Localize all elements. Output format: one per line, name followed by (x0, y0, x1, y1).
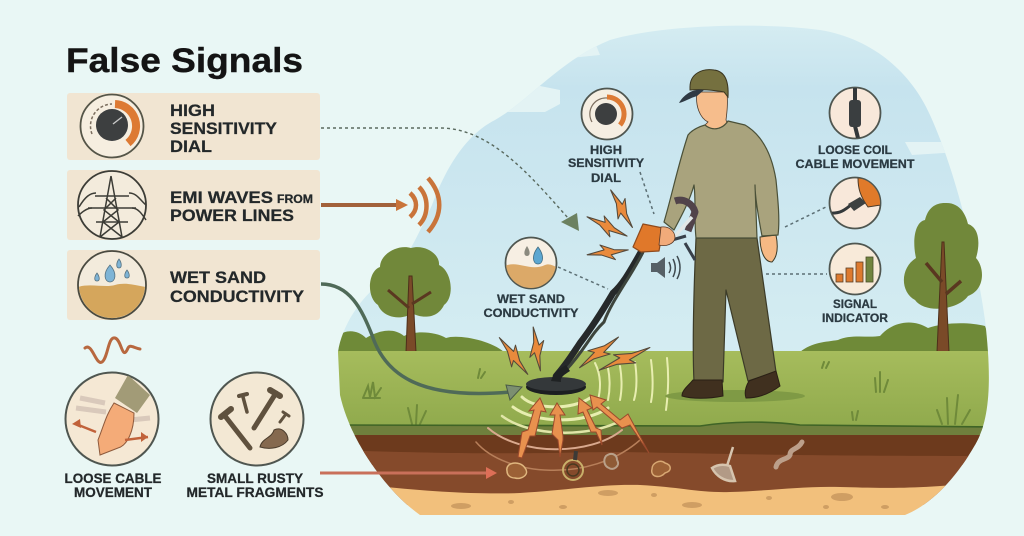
shadow under person (665, 390, 805, 402)
lightning bolts near control box (583, 186, 642, 267)
label: small rusty metal fragments: METAL FRAGMENTS (186, 485, 324, 500)
handle (675, 217, 692, 236)
label: loose coil cable movement: LOOSE COIL (818, 143, 892, 157)
upward signal arrows (518, 395, 649, 458)
label: loose cable movement (64, 471, 162, 500)
icon: dial callout (582, 88, 632, 140)
clouds (508, 46, 945, 155)
sand (390, 484, 946, 515)
turf edge (330, 422, 1000, 445)
panel: high sensitivity dial (67, 93, 320, 160)
label: loose cable movement: MOVEMENT (74, 485, 153, 500)
cap brim (679, 90, 704, 103)
icon: cable wave squiggle (85, 338, 140, 362)
label: high sensitivity dial (170, 101, 278, 156)
icon: pylon (78, 171, 146, 239)
buried object: wire (776, 442, 802, 467)
canopy (370, 247, 451, 317)
dashed connectors (558, 172, 828, 289)
label: small rusty metal fragments: SMALL RUSTY (207, 471, 303, 486)
label: dial callout (568, 143, 644, 185)
buried object: rock (507, 463, 527, 478)
lightning bolts near coil (491, 325, 653, 381)
panel: EMI waves (67, 170, 320, 240)
soil and sand layers (330, 422, 1000, 520)
background bushes left (336, 331, 504, 352)
label: small rusty metal fragments (186, 471, 324, 500)
label: high sensitivity dial: HIGH (170, 101, 215, 120)
panel: wet sand conductivity (67, 250, 320, 320)
icon: loose cable movement (66, 372, 158, 466)
trunk (937, 242, 949, 352)
right hand (760, 235, 777, 262)
lower soil (363, 451, 968, 505)
label: high sensitivity dial: SENSITIVITY (170, 119, 278, 138)
buried object: hammer (712, 447, 735, 481)
label: wet sand callout: WET SAND (497, 292, 565, 306)
neck and head (697, 92, 728, 130)
torso and right sleeve (664, 121, 779, 238)
label: high sensitivity dial: DIAL (170, 137, 212, 156)
icon: wet sand (78, 251, 146, 320)
buried object: fragment (604, 454, 618, 469)
sky (330, 20, 1000, 360)
canopy (904, 203, 982, 309)
label: wet sand conductivity (170, 268, 305, 306)
coil cable (566, 252, 643, 370)
icon: loose coil connector (830, 88, 880, 138)
signal arcs (476, 358, 668, 470)
arrow: wet sand cable to coil (321, 284, 522, 400)
trunk (406, 276, 416, 352)
left boot (682, 380, 723, 398)
label: loose coil cable movement (796, 143, 915, 171)
tree right (904, 203, 982, 352)
label: signal indicator: INDICATOR (822, 311, 888, 325)
label: loose coil cable movement: CABLE MOVEMENT (796, 157, 915, 171)
arrow: EMI waves to radiating signal (321, 178, 439, 232)
label: dial callout: SENSITIVITY (568, 156, 644, 170)
icon: signal indicator (830, 244, 880, 294)
dashed connector: dial to scene (321, 128, 579, 231)
grip and hanging cable (672, 236, 695, 260)
left hand (659, 227, 675, 246)
icon: rusty nails and fragments (210, 372, 304, 466)
panel: ground cross-section (330, 351, 1000, 520)
panel: sky backdrop (330, 20, 1000, 360)
label: dial callout: HIGH (590, 143, 622, 157)
cap (690, 70, 728, 97)
search coil (526, 365, 586, 395)
label: loose cable movement: LOOSE CABLE (64, 471, 162, 486)
arrow: fragments to buried objects (320, 467, 497, 479)
grass (330, 351, 1000, 431)
label: wet sand conductivity: WET SAND (170, 268, 266, 287)
label: EMI waves: POWER LINES (170, 206, 294, 225)
label: wet sand callout: CONDUCTIVITY (484, 306, 578, 320)
label: dial callout: DIAL (591, 171, 621, 185)
label: signal indicator (822, 297, 888, 325)
background bushes right (800, 322, 995, 352)
grass tufts (363, 362, 970, 424)
label: EMI waves: EMI WAVES (170, 188, 273, 207)
label: wet sand callout (484, 292, 578, 320)
icon: cable plug (829, 178, 881, 228)
label: signal indicator: SIGNAL (833, 297, 877, 311)
person with metal detector (526, 70, 780, 398)
title: False Signals (66, 42, 303, 80)
label: EMI waves: FROM (277, 194, 313, 206)
tree left (370, 247, 451, 352)
detector shaft (556, 252, 641, 376)
label: wet sand conductivity: CONDUCTIVITY (170, 287, 305, 306)
arm cuff (675, 200, 695, 231)
control box (633, 224, 663, 252)
speaker icon (651, 256, 680, 279)
pants (693, 238, 776, 382)
icon: dial (80, 94, 144, 158)
right boot (745, 371, 780, 398)
icon: wet sand callout (505, 238, 558, 292)
buried object: rock two (652, 461, 670, 476)
upper soil (330, 435, 1000, 465)
label: EMI waves (170, 188, 313, 225)
buried object: ring (563, 451, 583, 480)
